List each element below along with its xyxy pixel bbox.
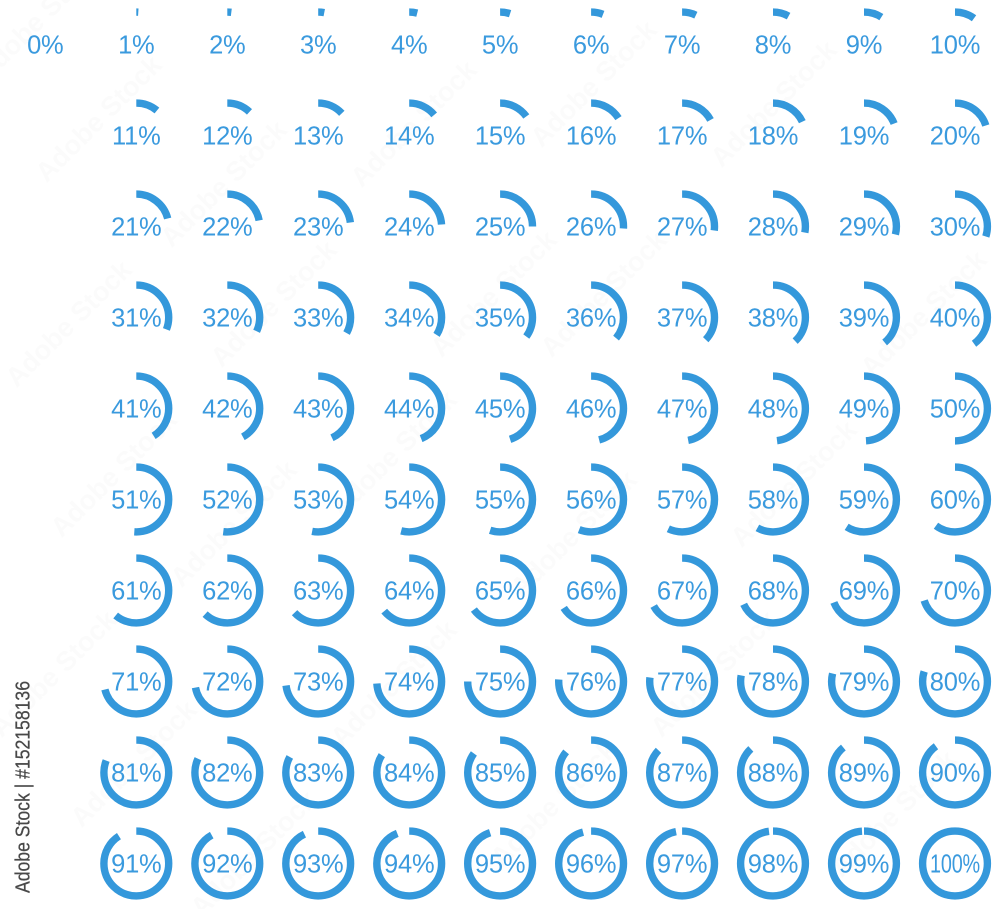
gauge 68%: 68% <box>748 578 798 606</box>
gauge 100%: 100% <box>930 850 980 878</box>
gauge 22% <box>195 194 260 259</box>
gauge 9%: 9% <box>846 32 882 60</box>
gauge 80%: 80% <box>930 668 980 696</box>
gauge 78%: 78% <box>748 668 798 696</box>
gauge 95% <box>468 831 532 896</box>
gauge 29%: 29% <box>839 214 889 242</box>
gauge 50%: 50% <box>930 396 980 424</box>
gauge 22%: 22% <box>202 214 253 242</box>
gauge 74%: 74% <box>384 668 434 696</box>
gauge 14% <box>377 103 442 168</box>
gauge 30% <box>923 194 987 259</box>
gauge 3% <box>286 12 351 77</box>
gauge 67%: 67% <box>657 578 707 606</box>
gauge 57% <box>650 467 714 532</box>
watermark pattern: Adobe Stock <box>425 224 563 363</box>
gauge 58%: 58% <box>748 486 798 514</box>
watermark pattern: Adobe Stock <box>345 54 483 193</box>
gauge 79% <box>832 649 896 714</box>
gauge 66%: 66% <box>566 578 616 606</box>
gauge 3%: 3% <box>300 32 336 60</box>
gauge 55% <box>468 467 532 532</box>
gauge 25%: 25% <box>475 214 525 242</box>
gauge 11% <box>104 103 169 168</box>
gauge 14%: 14% <box>384 122 434 150</box>
gauge 10% <box>923 12 987 77</box>
gauge 71%: 71% <box>111 668 162 696</box>
gauge 51%: 51% <box>111 486 162 514</box>
gauge 24%: 24% <box>384 214 434 242</box>
gauge 35%: 35% <box>475 304 525 332</box>
gauge 39% <box>832 285 896 350</box>
gauge 27%: 27% <box>657 214 707 242</box>
gauge 28% <box>741 194 805 259</box>
watermark pattern: Adobe Stock <box>205 234 343 373</box>
gauge 41% <box>104 376 169 441</box>
gauge 26% <box>559 194 624 259</box>
gauge 94% <box>377 831 442 896</box>
watermark pattern: Adobe Stock <box>485 734 623 873</box>
gauge 47%: 47% <box>657 396 707 424</box>
gauge 42% <box>195 376 260 441</box>
gauge 95%: 95% <box>475 850 525 878</box>
gauge 71% <box>104 649 169 714</box>
gauge 81% <box>104 740 169 805</box>
gauge 23% <box>286 194 351 259</box>
gauge 38%: 38% <box>748 304 798 332</box>
watermark pattern: Adobe Stock <box>325 614 463 753</box>
gauge 7%: 7% <box>664 32 700 60</box>
gauge 75%: 75% <box>475 668 525 696</box>
gauge 19% <box>832 103 896 168</box>
gauge 57%: 57% <box>657 486 707 514</box>
gauge 79%: 79% <box>839 668 889 696</box>
gauge 15%: 15% <box>475 122 525 150</box>
gauge 34%: 34% <box>384 304 434 332</box>
gauge 42%: 42% <box>202 396 253 424</box>
gauge 25% <box>468 194 532 259</box>
gauge 27% <box>650 194 714 259</box>
gauge 64%: 64% <box>384 578 434 606</box>
gauge 68% <box>741 558 805 623</box>
watermark pattern: Adobe Stock <box>30 49 168 188</box>
gauge 36%: 36% <box>566 304 616 332</box>
gauge 9% <box>832 12 896 77</box>
gauge 1%: 1% <box>118 32 155 60</box>
gauge 8%: 8% <box>755 32 791 60</box>
gauge 60%: 60% <box>930 486 980 514</box>
gauge 43%: 43% <box>293 396 343 424</box>
gauge 97% <box>650 831 714 896</box>
watermark pattern: Adobe Stock <box>825 744 963 883</box>
gauge 74% <box>377 649 442 714</box>
gauge 30%: 30% <box>930 214 980 242</box>
gauge 84%: 84% <box>384 760 434 788</box>
gauge 4% <box>377 12 442 77</box>
gauge 12%: 12% <box>202 122 253 150</box>
gauge 87% <box>650 740 714 805</box>
gauge 24% <box>377 194 442 259</box>
gauge 4%: 4% <box>391 32 427 60</box>
gauge 54% <box>377 467 442 532</box>
gauge 91% <box>104 831 169 896</box>
gauge 89% <box>832 740 896 805</box>
watermark pattern: Adobe Stock <box>645 604 783 743</box>
gauge 2% <box>195 12 260 77</box>
gauge 73%: 73% <box>293 668 343 696</box>
gauge 5% <box>468 12 532 77</box>
gauge 98%: 98% <box>748 850 798 878</box>
gauge 69%: 69% <box>839 578 889 606</box>
watermark pattern: Adobe Stock <box>535 224 673 363</box>
gauge 59% <box>832 467 896 532</box>
gauge 84% <box>377 740 442 805</box>
gauge 31%: 31% <box>111 304 162 332</box>
gauge 85% <box>468 740 532 805</box>
gauge 43% <box>286 376 351 441</box>
gauge 44% <box>377 376 442 441</box>
gauge 53% <box>286 467 351 532</box>
gauge 73% <box>286 649 351 714</box>
side credit text: Adobe Stock | #152158136 <box>12 681 34 893</box>
gauge 33% <box>286 285 351 350</box>
gauge 37% <box>650 285 714 350</box>
gauge 28%: 28% <box>748 214 798 242</box>
gauge 16%: 16% <box>566 122 616 150</box>
gauge 64% <box>377 558 442 623</box>
gauge 55%: 55% <box>475 486 525 514</box>
gauge 85%: 85% <box>475 760 525 788</box>
gauge 65% <box>468 558 532 623</box>
gauge 56%: 56% <box>566 486 616 514</box>
watermark pattern: Adobe Stock <box>325 384 463 523</box>
gauge 5%: 5% <box>482 32 518 60</box>
gauge 8% <box>741 12 805 77</box>
gauge 51% <box>104 467 169 532</box>
gauge 6% <box>559 12 624 77</box>
gauge 78% <box>741 649 805 714</box>
gauge 32% <box>195 285 260 350</box>
gauge 70% <box>923 558 987 623</box>
gauge 6%: 6% <box>573 32 609 60</box>
gauge 23%: 23% <box>293 214 343 242</box>
gauge 66% <box>559 558 624 623</box>
gauge 89%: 89% <box>839 760 889 788</box>
gauge 17%: 17% <box>657 122 707 150</box>
gauge 97%: 97% <box>657 850 707 878</box>
gauge 96%: 96% <box>566 850 616 878</box>
gauge 38% <box>741 285 805 350</box>
gauge 48%: 48% <box>748 396 798 424</box>
gauge 59%: 59% <box>839 486 889 514</box>
gauge 75% <box>468 649 532 714</box>
gauge 77% <box>650 649 714 714</box>
gauge 45%: 45% <box>475 396 525 424</box>
gauge 88% <box>741 740 805 805</box>
gauge 90%: 90% <box>930 760 980 788</box>
gauge 32%: 32% <box>202 304 253 332</box>
gauge 20%: 20% <box>930 122 980 150</box>
gauge 62% <box>195 558 260 623</box>
gauge 54%: 54% <box>384 486 434 514</box>
gauge 52%: 52% <box>202 486 253 514</box>
gauge 19%: 19% <box>839 122 889 150</box>
gauge 49%: 49% <box>839 396 889 424</box>
gauge 48% <box>741 376 805 441</box>
gauge 12% <box>195 103 260 168</box>
gauge 82%: 82% <box>202 760 253 788</box>
gauge 2%: 2% <box>209 32 246 60</box>
gauge 0%: 0% <box>27 32 64 60</box>
gauge 96% <box>559 831 624 896</box>
gauge 34% <box>377 285 442 350</box>
gauge 37%: 37% <box>657 304 707 332</box>
gauge 76%: 76% <box>566 668 616 696</box>
gauge 53%: 53% <box>293 486 343 514</box>
gauge 100% <box>923 831 987 896</box>
gauge 82% <box>195 740 260 805</box>
watermark pattern: Adobe Stock <box>45 404 183 543</box>
gauge 81%: 81% <box>111 760 162 788</box>
gauge 21% <box>104 194 169 259</box>
gauge 18% <box>741 103 805 168</box>
gauge 39%: 39% <box>839 304 889 332</box>
gauge 17% <box>650 103 714 168</box>
gauge 16% <box>559 103 624 168</box>
gauge 91%: 91% <box>111 850 162 878</box>
watermark pattern: Adobe Stock <box>65 694 203 833</box>
gauge 41%: 41% <box>111 396 162 424</box>
gauge 58% <box>741 467 805 532</box>
gauge 69% <box>832 558 896 623</box>
watermark pattern: Adobe Stock <box>165 454 303 593</box>
gauge 45% <box>468 376 532 441</box>
gauge 61% <box>104 558 169 623</box>
gauge 83%: 83% <box>293 760 343 788</box>
watermark pattern: Adobe Stock <box>0 254 138 393</box>
gauge 36% <box>559 285 624 350</box>
gauge 20% <box>923 103 987 168</box>
gauge 99%: 99% <box>839 850 889 878</box>
watermark pattern: Adobe Stock <box>705 34 843 173</box>
gauge 47% <box>650 376 714 441</box>
gauge 40%: 40% <box>930 304 980 332</box>
gauge 86%: 86% <box>566 760 616 788</box>
gauge 21%: 21% <box>111 214 162 242</box>
gauge 13%: 13% <box>293 122 343 150</box>
gauge 49% <box>832 376 896 441</box>
gauge 67% <box>650 558 714 623</box>
watermark pattern: Adobe Stock <box>155 114 293 253</box>
gauge 93% <box>286 831 351 896</box>
gauge 92% <box>195 831 260 896</box>
watermark pattern: Adobe Stock <box>505 464 643 603</box>
gauge 56% <box>559 467 624 532</box>
gauge 33%: 33% <box>293 304 343 332</box>
gauge 93%: 93% <box>293 850 343 878</box>
gauge 87%: 87% <box>657 760 707 788</box>
gauge 86% <box>559 740 624 805</box>
gauge 44%: 44% <box>384 396 434 424</box>
gauge 92%: 92% <box>202 850 253 878</box>
gauge 99% <box>832 831 896 896</box>
watermark pattern: Adobe Stock <box>525 14 663 153</box>
gauge 1% <box>104 12 169 77</box>
gauge 83% <box>286 740 351 805</box>
gauge 94%: 94% <box>384 850 434 878</box>
gauge 52% <box>195 467 260 532</box>
gauge 63%: 63% <box>293 578 343 606</box>
gauge 10%: 10% <box>930 32 980 60</box>
gauge 18%: 18% <box>748 122 798 150</box>
watermark pattern: Adobe Stock <box>855 244 993 383</box>
gauge 26%: 26% <box>566 214 616 242</box>
gauge 72% <box>195 649 260 714</box>
gauge 65%: 65% <box>475 578 525 606</box>
gauge 50% <box>923 376 987 441</box>
gauge 88%: 88% <box>748 760 798 788</box>
gauge 61%: 61% <box>111 578 162 606</box>
gauge 46%: 46% <box>566 396 616 424</box>
gauge 62%: 62% <box>202 578 253 606</box>
gauge 7% <box>650 12 714 77</box>
gauge 31% <box>104 285 169 350</box>
gauge 80% <box>923 649 987 714</box>
gauge 72%: 72% <box>202 668 253 696</box>
gauge 70%: 70% <box>930 578 980 606</box>
gauge 15% <box>468 103 532 168</box>
gauge 63% <box>286 558 351 623</box>
gauge 98% <box>741 831 805 896</box>
gauge 76% <box>559 649 624 714</box>
gauge 46% <box>559 376 624 441</box>
gauge 40% <box>923 285 987 350</box>
gauge 60% <box>923 467 987 532</box>
watermark pattern: Adobe Stock <box>725 414 863 553</box>
gauge 90% <box>923 740 987 805</box>
gauge 11%: 11% <box>112 122 161 150</box>
gauge 35% <box>468 285 532 350</box>
gauge 29% <box>832 194 896 259</box>
gauge 13% <box>286 103 351 168</box>
gauge 77%: 77% <box>657 668 707 696</box>
